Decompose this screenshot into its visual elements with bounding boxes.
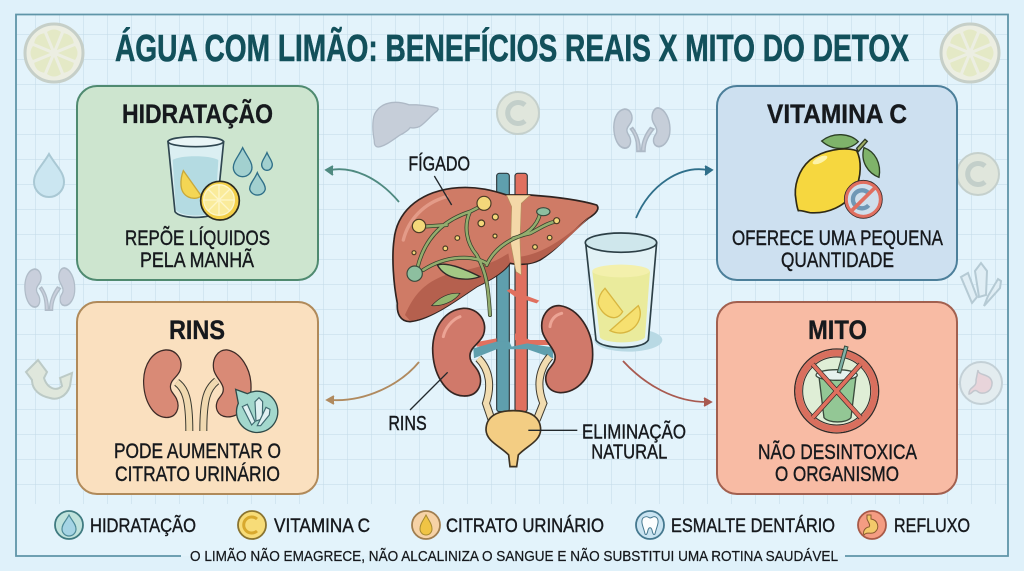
icon: faded crystals xyxy=(961,263,1001,306)
arrow: to hidratação xyxy=(326,166,399,202)
panel: mito xyxy=(717,302,957,494)
icon: lemon slice right xyxy=(941,24,999,82)
label: eliminação natural: ELIMINAÇÃO xyxy=(582,419,686,443)
text: não desintoxica xyxy=(758,440,917,486)
legend item: citrato urinário xyxy=(412,511,604,539)
label: rins xyxy=(388,372,448,435)
icon: faded liver xyxy=(373,102,438,147)
icon: glass with lemon and drops xyxy=(168,137,272,220)
heading: hidratação: HIDRATAÇÃO xyxy=(122,98,273,129)
glass of lemon water xyxy=(585,233,662,352)
text: não desintoxica: NÃO DESINTOXICA xyxy=(758,440,917,464)
kidneys xyxy=(433,306,593,396)
icon: crossed detox cup xyxy=(795,346,879,433)
text: pequena quantidade: QUANTIDADE xyxy=(781,249,894,272)
liver xyxy=(393,187,598,322)
arrow: to mito xyxy=(623,361,711,406)
panel: rins xyxy=(77,302,318,494)
text: repõe líquidos: PELA MANHÃ xyxy=(140,248,254,272)
panel: hidratação xyxy=(77,86,318,280)
text: repõe líquidos xyxy=(125,226,270,272)
icon: faded stomach xyxy=(960,362,1002,404)
legend item: vitamina C xyxy=(238,511,370,539)
legend item: esmalte dentário xyxy=(636,511,835,539)
footer note: O LIMÃO NÃO EMAGRECE, NÃO ALCALINIZA O SANGUE E NÃO SUBSTITUI UMA ROTINA SAUDÁVEL xyxy=(190,548,838,565)
label: eliminação natural: NATURAL xyxy=(591,442,667,464)
ureters xyxy=(478,357,550,420)
heading: vitamina C: VITAMINA C xyxy=(767,99,907,129)
icon: faded vitamin C right xyxy=(957,153,999,195)
label: eliminação natural xyxy=(528,419,686,464)
panel: vitamina C xyxy=(717,86,957,280)
text: citrato urinário xyxy=(114,440,281,486)
icon: lemon with crossed C xyxy=(795,135,882,218)
text: citrato urinário: CITRATO URINÁRIO xyxy=(115,463,280,486)
legend xyxy=(55,511,970,539)
text: repõe líquidos: REPÕE LÍQUIDOS xyxy=(125,226,270,250)
legend item: hidratação xyxy=(55,511,196,539)
icon: lemon slice left xyxy=(25,24,83,82)
legend item: refluxo: REFLUXO xyxy=(894,516,970,537)
label: fígado xyxy=(408,153,470,205)
icon: faded vitamin C top xyxy=(497,92,539,134)
arrow: to rins xyxy=(327,362,419,404)
label: rins: RINS xyxy=(388,413,427,435)
bile ducts and nodules xyxy=(407,196,560,315)
heading: rins: RINS xyxy=(169,315,225,345)
legend item: refluxo xyxy=(858,511,970,539)
icon: kidneys with crystal bubble xyxy=(144,350,278,432)
text: pequena quantidade: OFERECE UMA PEQUENA xyxy=(732,227,943,250)
text: pequena quantidade xyxy=(732,227,943,272)
faded background icons xyxy=(25,24,1002,404)
legend item: vitamina C: VITAMINA C xyxy=(274,516,370,537)
icon: faded kidneys top xyxy=(614,108,670,151)
text: não desintoxica: O ORGANISMO xyxy=(775,463,899,486)
blood vessels xyxy=(473,173,553,412)
text: citrato urinário: PODE AUMENTAR O xyxy=(114,440,281,463)
legend item: esmalte dentário: ESMALTE DENTÁRIO xyxy=(671,516,835,537)
bladder xyxy=(486,411,541,467)
icon: faded kidneys left xyxy=(25,268,75,310)
arrow: to vitamina C xyxy=(636,166,712,218)
legend item: hidratação: HIDRATAÇÃO xyxy=(90,515,196,537)
legend item: citrato urinário: CITRATO URINÁRIO xyxy=(446,516,604,537)
icon: faded drop xyxy=(34,154,64,197)
icon: faded recycle arrows xyxy=(26,360,72,399)
heading: mito: MITO xyxy=(808,315,867,345)
label: fígado: FÍGADO xyxy=(408,153,470,176)
central anatomy illustration xyxy=(388,153,686,467)
